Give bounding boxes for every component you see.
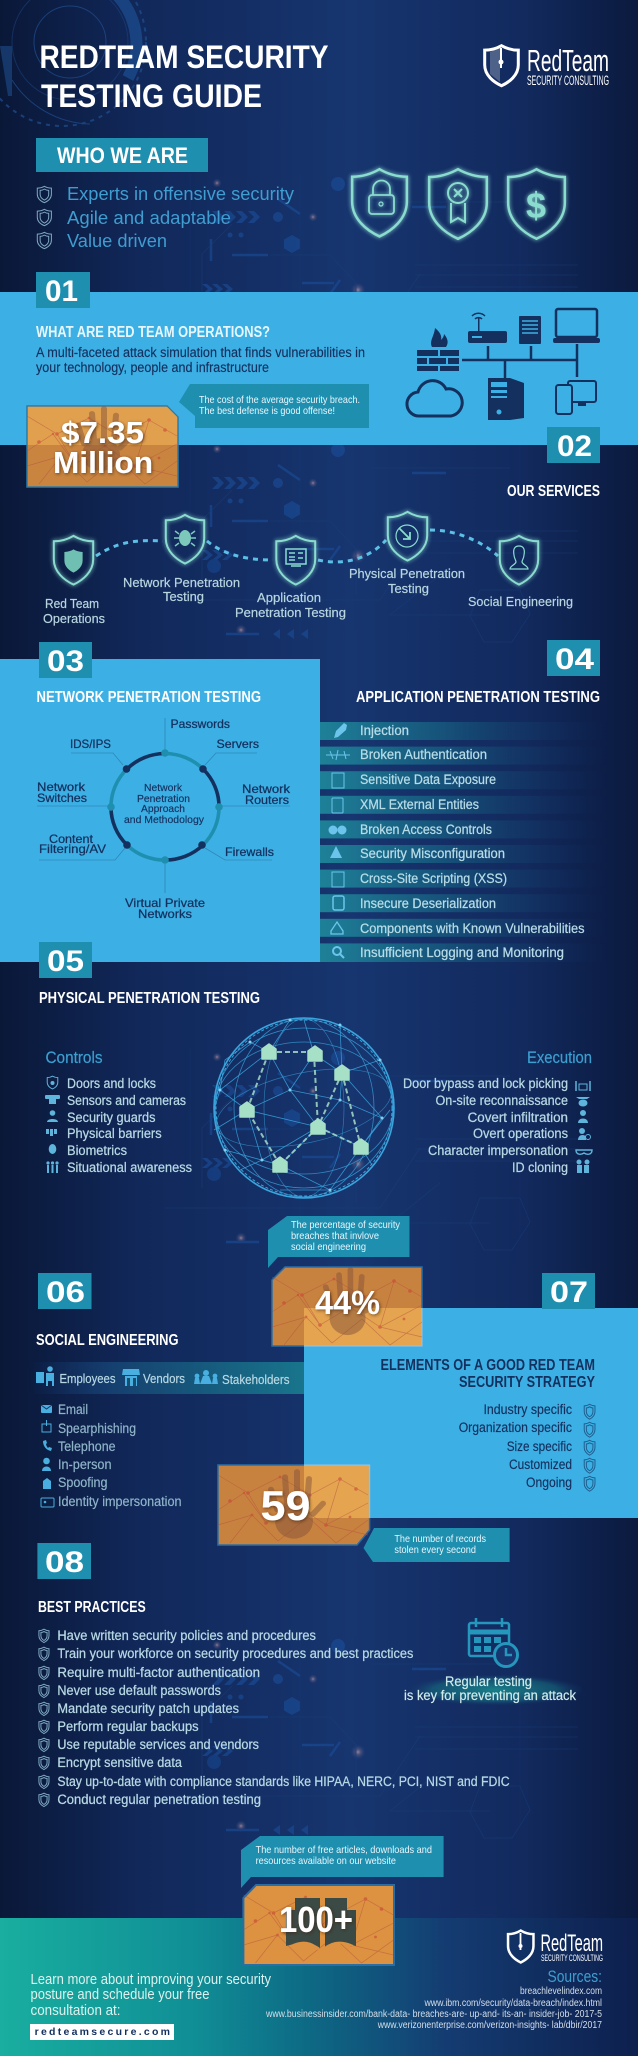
callout: free resources: The number of free articles, downloads and (256, 1844, 432, 1856)
number badge 08 (37, 1543, 91, 1579)
call to action text: Learn more about improving your security (30, 1971, 271, 1988)
sources: www.verizonenterprise.com/verizon-insights- lab/dbir/2017 (377, 2020, 602, 2031)
heading: elements of strategy (380, 1357, 596, 1391)
ring diagram: network penetration methodology: IDS/IPS (70, 737, 111, 751)
list: execution: On-site reconnaissance (436, 1093, 568, 1108)
stakeholder band (30, 1362, 304, 1394)
callout: records stolen: The number of records (394, 1533, 486, 1545)
list: best practices: Train your workforce on security procedures and best practices (57, 1646, 414, 1661)
heading: social engineering: SOCIAL ENGINEERING (36, 1332, 178, 1349)
who we are list: Agile and adaptable (67, 208, 231, 228)
callout: breach cost (179, 384, 369, 428)
ring diagram: network penetration methodology: Passwords (170, 717, 230, 731)
sources (265, 1967, 602, 2031)
list: controls: Sensors and cameras (67, 1093, 186, 1108)
service: red team operations (43, 536, 105, 626)
stat: 44% (272, 1267, 422, 1346)
call to action text: consultation at: (30, 2002, 120, 2019)
service: application penetration testing (235, 536, 346, 620)
list: best practices: Never use default passwords (57, 1683, 221, 1698)
heading: elements of strategy: SECURITY STRATEGY (459, 1374, 596, 1391)
panel: section 07 (304, 1308, 638, 1518)
heading: best practices: BEST PRACTICES (38, 1599, 146, 1616)
stakeholder band: Vendors (143, 1371, 185, 1386)
number badge 05 (39, 942, 92, 978)
list: social engineering methods: Email (58, 1402, 88, 1417)
list: best practices: Use reputable services and vendors (57, 1737, 259, 1752)
service: red team operations: Red Team (45, 596, 99, 611)
ring diagram: network penetration methodology: Switches (37, 791, 87, 805)
number badge 01 (36, 272, 90, 308)
title: TESTING GUIDE (41, 78, 262, 114)
heading: physical penetration testing: PHYSICAL PENETRATION TESTING (39, 990, 260, 1007)
list: best practices: Mandate security patch updates (57, 1701, 239, 1716)
icons: three shields: $ (526, 185, 546, 226)
panel: section 01 blue band (0, 292, 638, 445)
list: social engineering methods: Spoofing (58, 1475, 108, 1490)
section 01 description (36, 345, 365, 375)
service: application penetration testing: Penetration Testing (235, 605, 346, 620)
number badge 02 (547, 427, 600, 463)
call to action text: posture and schedule your free (30, 1986, 210, 2003)
stat: 100+: 100+ (279, 1899, 353, 1940)
list: application vulnerabilities: XML External Entities (360, 797, 479, 812)
number badge 06 (38, 1273, 92, 1309)
ring diagram: network penetration methodology: Networks (138, 907, 192, 921)
ring diagram: network penetration methodology: Filtering/AV (39, 842, 106, 856)
list: controls: Physical barriers (67, 1126, 162, 1141)
list: application vulnerabilities: Broken Authentication (360, 747, 487, 762)
panel: footer (0, 1918, 638, 2056)
number badge 04: 04 (555, 643, 594, 676)
list: elements of strategy (459, 1402, 595, 1491)
callout: social engineering share (268, 1216, 410, 1268)
heading: who we are (36, 138, 208, 172)
list: application vulnerabilities: Sensitive Data Exposure (360, 772, 496, 787)
stat: 44%: 44% (315, 1284, 380, 1321)
ring diagram: network penetration methodology: Network (144, 782, 183, 794)
background tech pattern (165, 174, 578, 1838)
ring diagram: network penetration methodology: Content (49, 832, 94, 846)
section 01 description: your technology, people and infrastructure (36, 360, 269, 375)
list: execution (403, 1048, 592, 1175)
ring diagram: network penetration methodology: Network (37, 780, 86, 794)
list: best practices: Encrypt sensitive data (57, 1755, 182, 1770)
service: network penetration testing (123, 515, 240, 604)
list: social engineering methods: Identity impersonation (58, 1494, 182, 1509)
list: application vulnerabilities: Injection (360, 723, 409, 738)
list: elements of strategy: Customized (509, 1457, 572, 1472)
list: best practices (39, 1628, 510, 1807)
section 01 description: A multi-faceted attack simulation that finds vulnerabilities in (36, 345, 365, 360)
list: application vulnerabilities: Insecure Deserialization (360, 896, 496, 911)
service: application penetration testing: Application (257, 590, 321, 605)
stat: $7.35 million (27, 406, 178, 487)
list: execution: Door bypass and lock picking (403, 1076, 568, 1091)
list: execution: Character impersonation (428, 1143, 568, 1158)
service: social engineering (468, 536, 573, 609)
service: network penetration testing: Testing (163, 589, 204, 604)
service: social engineering: Social Engineering (468, 594, 573, 609)
sources: breachlevelindex.com (520, 1986, 602, 1997)
stakeholder band: Stakeholders (222, 1372, 290, 1387)
icon: calendar and clock (469, 1618, 518, 1666)
call to action text (30, 1971, 271, 2019)
sources: Sources: (548, 1967, 602, 1986)
heading: elements of strategy: ELEMENTS OF A GOOD RED TEAM (380, 1357, 595, 1374)
stat: 59 (218, 1465, 370, 1545)
number badge 04 (547, 640, 600, 676)
list: application vulnerabilities: Components with Known Vulnerabilities (360, 921, 585, 936)
list: application vulnerabilities (320, 722, 610, 962)
list: social engineering methods: In-person (58, 1457, 112, 1472)
callout: regular testing: Regular testing (445, 1674, 532, 1689)
who we are list (37, 184, 294, 251)
ring diagram: network penetration methodology: Network (242, 782, 291, 796)
stat: $7.35 million: $7.35 (61, 415, 144, 450)
list: elements of strategy: Ongoing (526, 1475, 572, 1490)
number badge 08: 08 (45, 1546, 84, 1579)
ring diagram: network penetration methodology: and Methodology (124, 814, 205, 826)
who we are list: Value driven (67, 231, 167, 251)
list: best practices: Conduct regular penetration testing (57, 1792, 261, 1807)
number badge 07 (542, 1273, 595, 1309)
callout: free resources: resources available on our website (256, 1855, 396, 1867)
list: execution: Covert infiltration (468, 1110, 568, 1125)
ring diagram: network penetration methodology: Penetration (137, 793, 190, 805)
callout: free resources (241, 1836, 444, 1888)
number badge 01: 01 (45, 275, 78, 308)
number badge 07: 07 (550, 1276, 588, 1309)
callout: regular testing: is key for preventing an attack (404, 1688, 576, 1703)
title (40, 39, 328, 114)
service: red team operations: Operations (43, 611, 105, 626)
decorative HUD rings (0, 0, 146, 126)
heading: who we are: WHO WE ARE (57, 143, 188, 168)
ring diagram: network penetration methodology: Firewalls (225, 845, 274, 859)
website box: redteamsecure.com (35, 2026, 170, 2038)
list: elements of strategy: Organization specific (459, 1420, 572, 1435)
list: elements of strategy: Size specific (507, 1439, 572, 1454)
list: controls: Security guards (67, 1110, 156, 1125)
number badge 03: 03 (47, 645, 84, 678)
list: application vulnerabilities: Broken Access Controls (360, 822, 492, 837)
footer logo (508, 1930, 603, 1964)
ring diagram: network penetration methodology: Routers (245, 793, 289, 807)
callout: regular testing (404, 1674, 585, 1706)
heading: network penetration testing: NETWORK PENETRATION TESTING (36, 689, 261, 706)
list: best practices: Stay up-to-date with compliance standards like HIPAA, NERC, PCI, NIST and FDIC (57, 1774, 510, 1789)
number badge 03 (39, 642, 92, 678)
stakeholder band: Employees (60, 1371, 116, 1386)
number badge 05: 05 (47, 945, 84, 978)
list: social engineering methods: Spearphishing (58, 1421, 136, 1436)
logo (485, 43, 609, 88)
callout: social engineering share: social engineering (291, 1241, 366, 1253)
title: REDTEAM SECURITY (40, 39, 328, 75)
list: controls: Controls (46, 1048, 102, 1067)
stat: 100+ (243, 1885, 394, 1965)
service: network penetration testing: Network Penetration (123, 575, 240, 590)
list: execution: Execution (527, 1048, 592, 1067)
list: social engineering methods (41, 1402, 182, 1509)
list: application vulnerabilities: Cross-Site Scripting (XSS) (360, 871, 507, 886)
section 01 heading: WHAT ARE RED TEAM OPERATIONS? (36, 324, 270, 341)
list: controls: Situational awareness (67, 1160, 192, 1175)
list: controls: Biometrics (67, 1143, 127, 1158)
callout: records stolen (364, 1528, 510, 1562)
stat: $7.35 million: Million (53, 445, 153, 480)
stat: 59: 59 (260, 1482, 310, 1529)
service: physical penetration testing: Testing (388, 581, 429, 596)
list: best practices: Perform regular backups (57, 1719, 199, 1734)
services timeline path (96, 530, 498, 562)
list: elements of strategy: Industry specific (484, 1402, 572, 1417)
number badge 06: 06 (46, 1276, 85, 1309)
icons: three shields (352, 169, 565, 239)
list: controls: Doors and locks (67, 1076, 156, 1091)
sources: www.ibm.com/security/data-breach/index.html (424, 1998, 602, 2009)
heading: our services: OUR SERVICES (507, 483, 600, 500)
ring diagram: network penetration methodology: Approach (141, 803, 185, 815)
list: execution: ID cloning (512, 1160, 568, 1175)
service: physical penetration testing: Physical Penetration (349, 566, 465, 581)
callout: records stolen: stolen every second (394, 1544, 476, 1556)
service: physical penetration testing (349, 512, 465, 596)
list: controls (45, 1048, 192, 1175)
globe network graphic (210, 1018, 398, 1198)
list: best practices: Require multi-factor authentication (57, 1665, 260, 1680)
list: social engineering methods: Telephone (58, 1439, 116, 1454)
callout: breach cost: The cost of the average security breach. (199, 394, 360, 406)
callout: breach cost: The best defense is good offense! (199, 405, 335, 417)
ring diagram: network penetration methodology (37, 717, 291, 921)
list: application vulnerabilities: Insufficient Logging and Monitoring (360, 945, 564, 960)
list: execution: Overt operations (473, 1126, 568, 1141)
who we are list: Experts in offensive security (67, 184, 294, 204)
ring diagram: network penetration methodology: Servers (216, 737, 259, 751)
number badge 02: 02 (557, 430, 592, 463)
ring diagram: network penetration methodology: Virtual Private (125, 896, 205, 910)
heading: application penetration testing: APPLICATION PENETRATION TESTING (356, 689, 600, 706)
callout: social engineering share: The percentage of security (291, 1219, 401, 1231)
panel: section 03 (0, 659, 320, 962)
callout: social engineering share: breaches that invlove (291, 1230, 379, 1242)
icon: network diagram (407, 309, 600, 420)
list: application vulnerabilities: Security Misconfiguration (360, 846, 505, 861)
list: best practices: Have written security policies and procedures (57, 1628, 316, 1643)
